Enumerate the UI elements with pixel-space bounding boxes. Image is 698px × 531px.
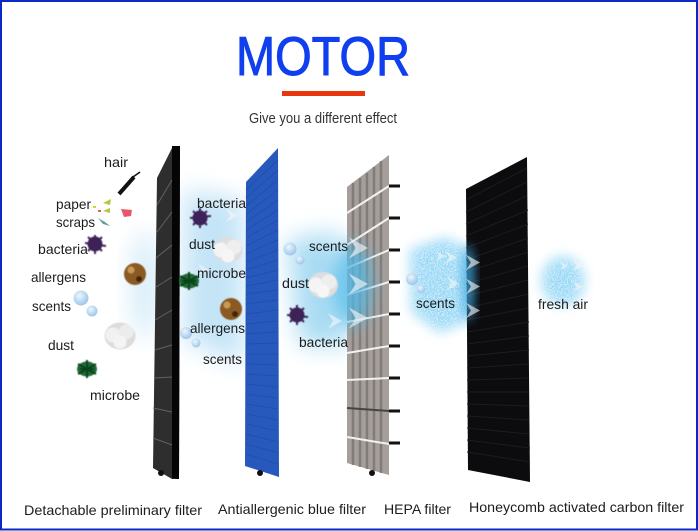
icon: bacteria 3 [287, 305, 308, 325]
labels: after preliminary filter: dust [189, 236, 215, 252]
filter: detachable preliminary [153, 146, 180, 479]
filter: HEPA [347, 155, 400, 476]
icon: dust 1 [104, 322, 136, 350]
caption: carbon filter: Honeycomb activated carbon filter [469, 499, 684, 515]
air arrows: first bay [198, 209, 238, 275]
icon: dust 3 [308, 272, 338, 298]
labels: contaminants before first filter: dust [48, 337, 74, 353]
labels: after blue filter: bacteria [299, 334, 348, 350]
label: fresh air: fresh air [538, 296, 588, 312]
labels: after preliminary filter [189, 195, 246, 367]
labels: after preliminary filter: microbe [197, 265, 246, 281]
air cloud: after carbon filter [542, 257, 584, 305]
icon: scent bubbles 4 [406, 273, 425, 293]
icon: microbe 2 [179, 272, 199, 290]
labels: contaminants before first filter: hair [104, 154, 128, 170]
icon: hair [119, 172, 140, 194]
labels: contaminants before first filter: microbe [90, 387, 140, 403]
labels: after blue filter: scents [309, 238, 348, 254]
title accent bar [282, 91, 365, 96]
caption: blue filter: Antiallergenic blue filter [218, 501, 366, 517]
air cloud: between HEPA and carbon filter [410, 238, 470, 332]
icon: dust 2 [214, 237, 242, 263]
labels: after blue filter [282, 238, 348, 350]
icon: scent bubbles 2 [180, 327, 200, 348]
icon: allergen 1 [124, 263, 146, 285]
icon: microbe 1 [77, 360, 97, 378]
labels: contaminants before first filter: paper [56, 196, 91, 212]
icon: bacteria 1 [85, 235, 106, 254]
air cloud: left of first filter [131, 230, 159, 340]
labels: after preliminary filter: bacteria [197, 195, 246, 211]
labels: after preliminary filter: scents [203, 351, 242, 367]
caption: preliminary filter: Detachable preliminary filter [24, 502, 202, 518]
icon: bacteria 2 [190, 208, 211, 228]
labels: contaminants before first filter: scraps [56, 214, 95, 230]
caption: HEPA filter: HEPA filter [384, 501, 451, 517]
air cloud: between first and blue filter [184, 190, 244, 365]
labels: after blue filter: dust [282, 275, 309, 291]
icon: paper scraps [93, 199, 132, 226]
labels: contaminants before first filter: scents [32, 298, 71, 314]
air cloud: between blue and HEPA filter [288, 232, 350, 345]
labels: contaminants before first filter: bacteria [38, 241, 88, 257]
air glow at carbon filter [462, 245, 474, 321]
labels: contaminants before first filter [31, 154, 140, 403]
icon: scent bubbles 3 [284, 242, 304, 264]
air arrows: fresh air [560, 260, 583, 292]
air arrows: HEPA [328, 238, 368, 329]
filter: honeycomb activated carbon [466, 157, 530, 482]
icon: scent bubbles 1 [74, 290, 98, 316]
subtitle: Give you a different effect [249, 110, 398, 127]
labels: contaminants before first filter: allergens [31, 269, 86, 285]
labels: after preliminary filter: allergens [190, 320, 245, 336]
label: scents after HEPA: scents [416, 295, 455, 311]
air arrows: carbon inlet [436, 251, 480, 318]
air glow over HEPA filter [332, 243, 372, 327]
title: MOTOR [236, 25, 410, 87]
icon: allergen 2 [220, 298, 242, 320]
filter: antiallergenic blue [245, 148, 279, 477]
